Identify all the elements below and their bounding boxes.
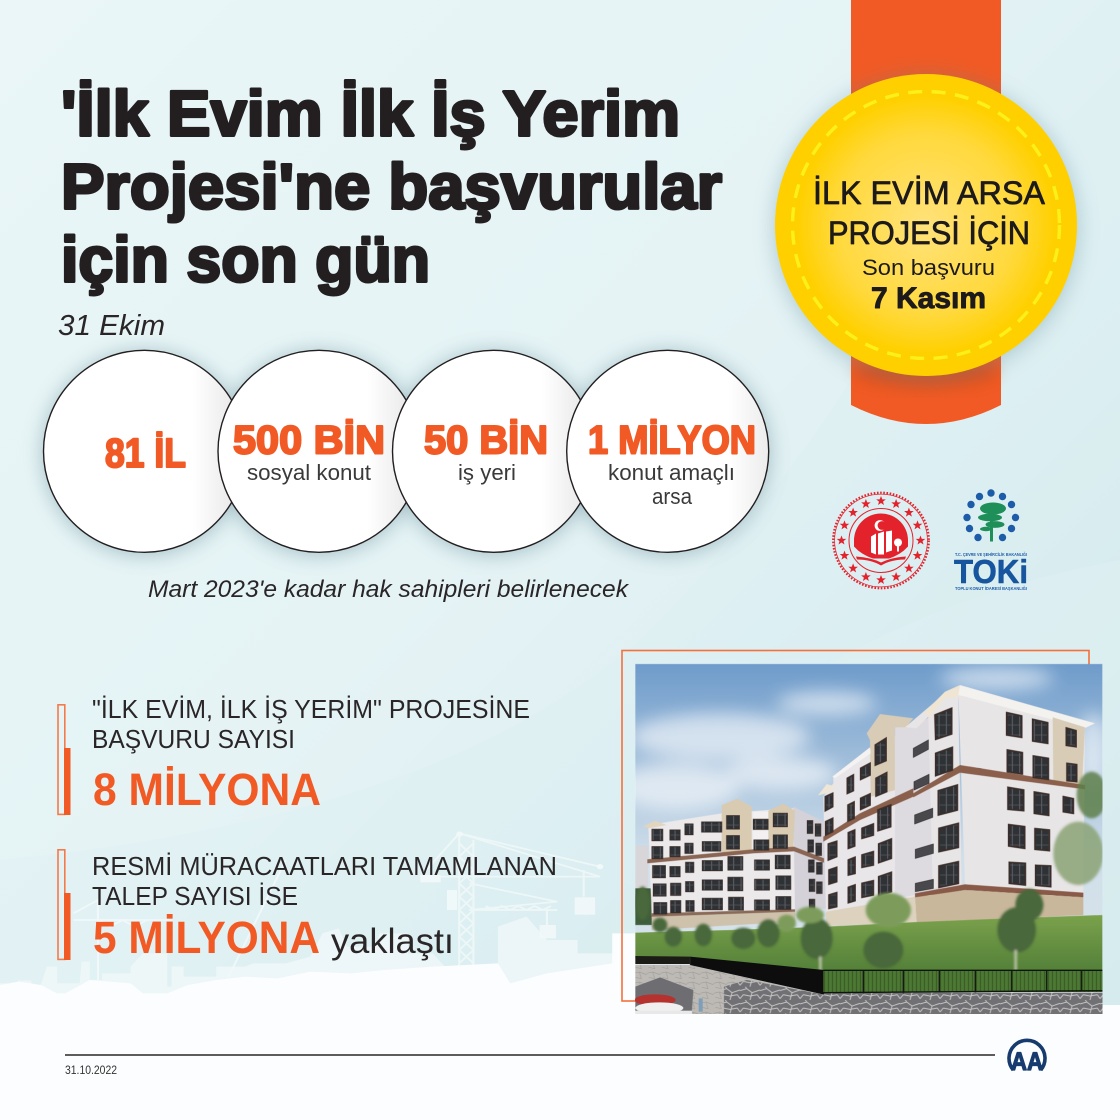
stat block: 5 milyona: yaklaştı: [331, 922, 454, 961]
circle: 500 BİN: 500 BİN: [233, 418, 385, 462]
logo: TOKİ: TOPLU KONUT İDARESİ BAŞKANLIĞI: [955, 584, 1027, 591]
construction skyline silhouette: [0, 831, 640, 1120]
circle: 1 MİLYON: konut amaçlı: [608, 460, 735, 485]
badge text: 7 Kasım: [871, 282, 986, 315]
logo: TOKİ: T.C. ÇEVRE VE ŞEHİRCİLİK BAKANLIĞI: [955, 550, 1027, 557]
circle: 81 İL: 81 İL: [105, 430, 186, 476]
badge text: PROJESİ İÇİN: [828, 215, 1030, 251]
circle: 50 BİN: iş yeri: [458, 460, 516, 485]
circle: 50 BİN: 50 BİN: [424, 418, 548, 462]
stat block: 5 milyona: 5 MİLYONA: [93, 912, 320, 963]
circle: 500 BİN: [218, 350, 420, 552]
orange ribbon: [851, 0, 1001, 424]
right apartment block: [818, 685, 1095, 926]
logo: AA: AA: [1011, 1048, 1043, 1076]
title: Projesi'ne başvurular: [61, 150, 722, 222]
badge text: İLK EVİM ARSA: [813, 175, 1046, 211]
lower white ground: [0, 1005, 1120, 1120]
logo: TOKİ: TOKi: [954, 553, 1028, 590]
stat block: 8 milyona: [58, 694, 530, 815]
circle: 500 BİN: sosyal konut: [247, 460, 371, 485]
circle: 50 BİN: [392, 350, 594, 552]
fence and retaining wall: [635, 956, 1103, 1014]
title: 'İlk Evim İlk İş Yerim: [61, 78, 680, 150]
left apartment block: [643, 799, 826, 930]
note under circles: Mart 2023'e kadar hak sahipleri belirlenecek: [148, 576, 630, 603]
trees: [635, 772, 1107, 975]
circle: 81 İL: [44, 350, 246, 552]
circle: 1 MİLYON: arsa: [652, 484, 693, 509]
distant building: [636, 846, 648, 888]
subtitle date: 31 Ekim: [58, 310, 165, 342]
title: [61, 78, 722, 296]
badge text: [813, 175, 1046, 315]
circle stats row: [42, 350, 770, 555]
logo: TOKİ: [954, 489, 1028, 591]
circle: 1 MİLYON: [567, 350, 769, 552]
circle: 1 MİLYON: 1 MİLYON: [588, 418, 756, 462]
footer date: 31.10.2022: [65, 1063, 117, 1077]
stat block: 5 milyona: [58, 850, 557, 963]
title: için son gün: [61, 224, 430, 296]
photo frame: [622, 650, 1089, 1001]
stat block: 8 milyona: BAŞVURU SAYISI: [92, 724, 295, 754]
photo: housing project: [613, 664, 1110, 1015]
logo: ministry seal: [833, 493, 929, 588]
stat block: 5 milyona: RESMİ MÜRACAATLARI TAMAMLANAN: [92, 851, 557, 881]
progress bar 2: [58, 850, 70, 960]
footer rule: [65, 1054, 995, 1056]
badge text: Son başvuru: [862, 255, 995, 280]
yellow badge: [773, 74, 1079, 381]
lawn: [635, 915, 1102, 973]
stat block: 8 milyona: "İLK EVİM, İLK İŞ YERİM" PROJESİNE: [92, 694, 530, 724]
stat block: 8 milyona: 8 MİLYONA: [93, 764, 321, 815]
progress bar 1: [58, 705, 70, 815]
parked cars: [634, 994, 703, 1015]
stat block: 5 milyona: TALEP SAYISI İSE: [92, 881, 298, 911]
